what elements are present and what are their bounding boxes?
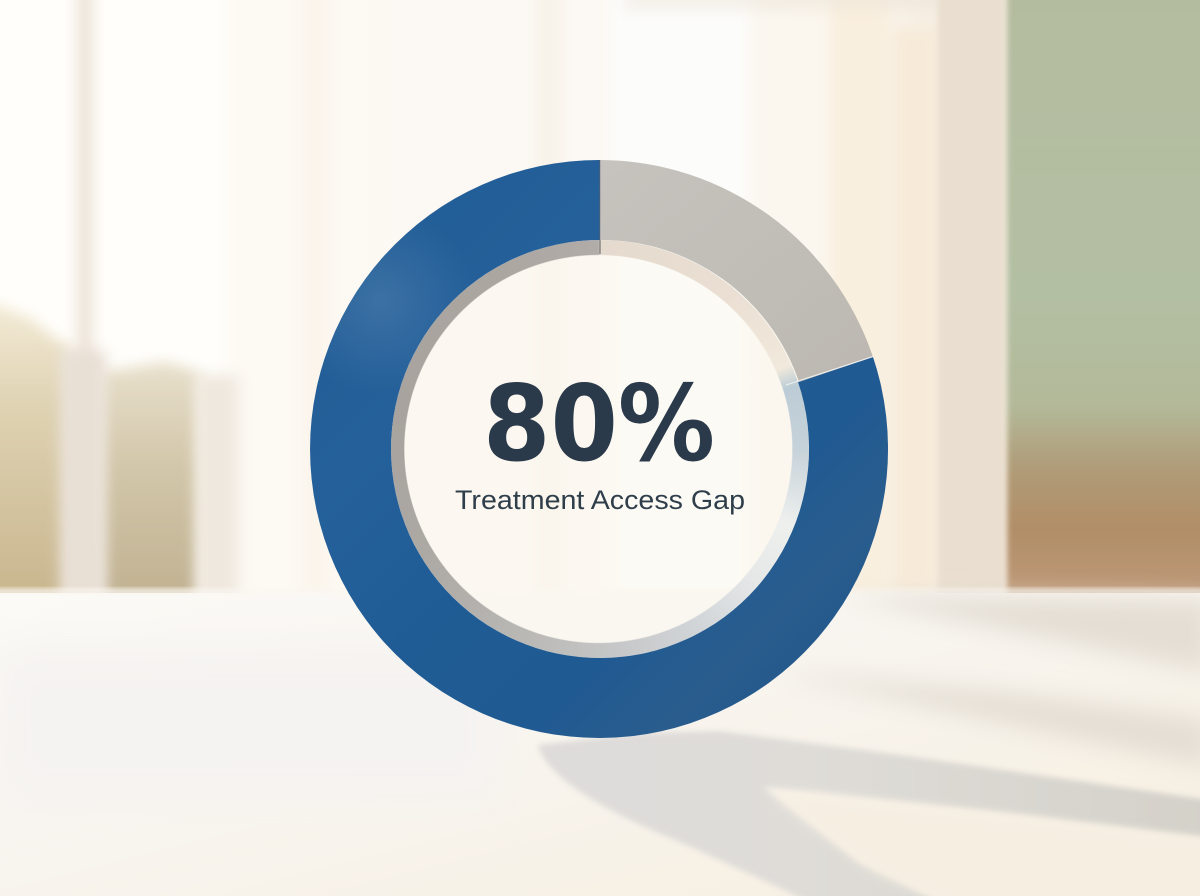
- soft lit wedge inside shadow: [770, 792, 1200, 896]
- window frames and curtains: [60, 0, 945, 610]
- segment: grey 20 percent: [601, 160, 873, 382]
- bevelled inner ring of the donut: [391, 240, 809, 658]
- table surface: [0, 588, 1200, 896]
- highlight on blue ring: [310, 160, 888, 738]
- tinted glass centre of donut: [405, 254, 795, 644]
- donut chart: 80 percent: [310, 160, 888, 738]
- outdoor hills lower left: [0, 298, 200, 600]
- light seam at grey end: [786, 356, 873, 385]
- cast shadow of donut: [538, 731, 1200, 896]
- big number: 80%: [483, 363, 715, 485]
- blurred window background: [0, 0, 1200, 610]
- label: Treatment Access Gap: [455, 485, 745, 515]
- segment: blue 80 percent: [310, 160, 888, 738]
- seam between segments: [599, 160, 601, 254]
